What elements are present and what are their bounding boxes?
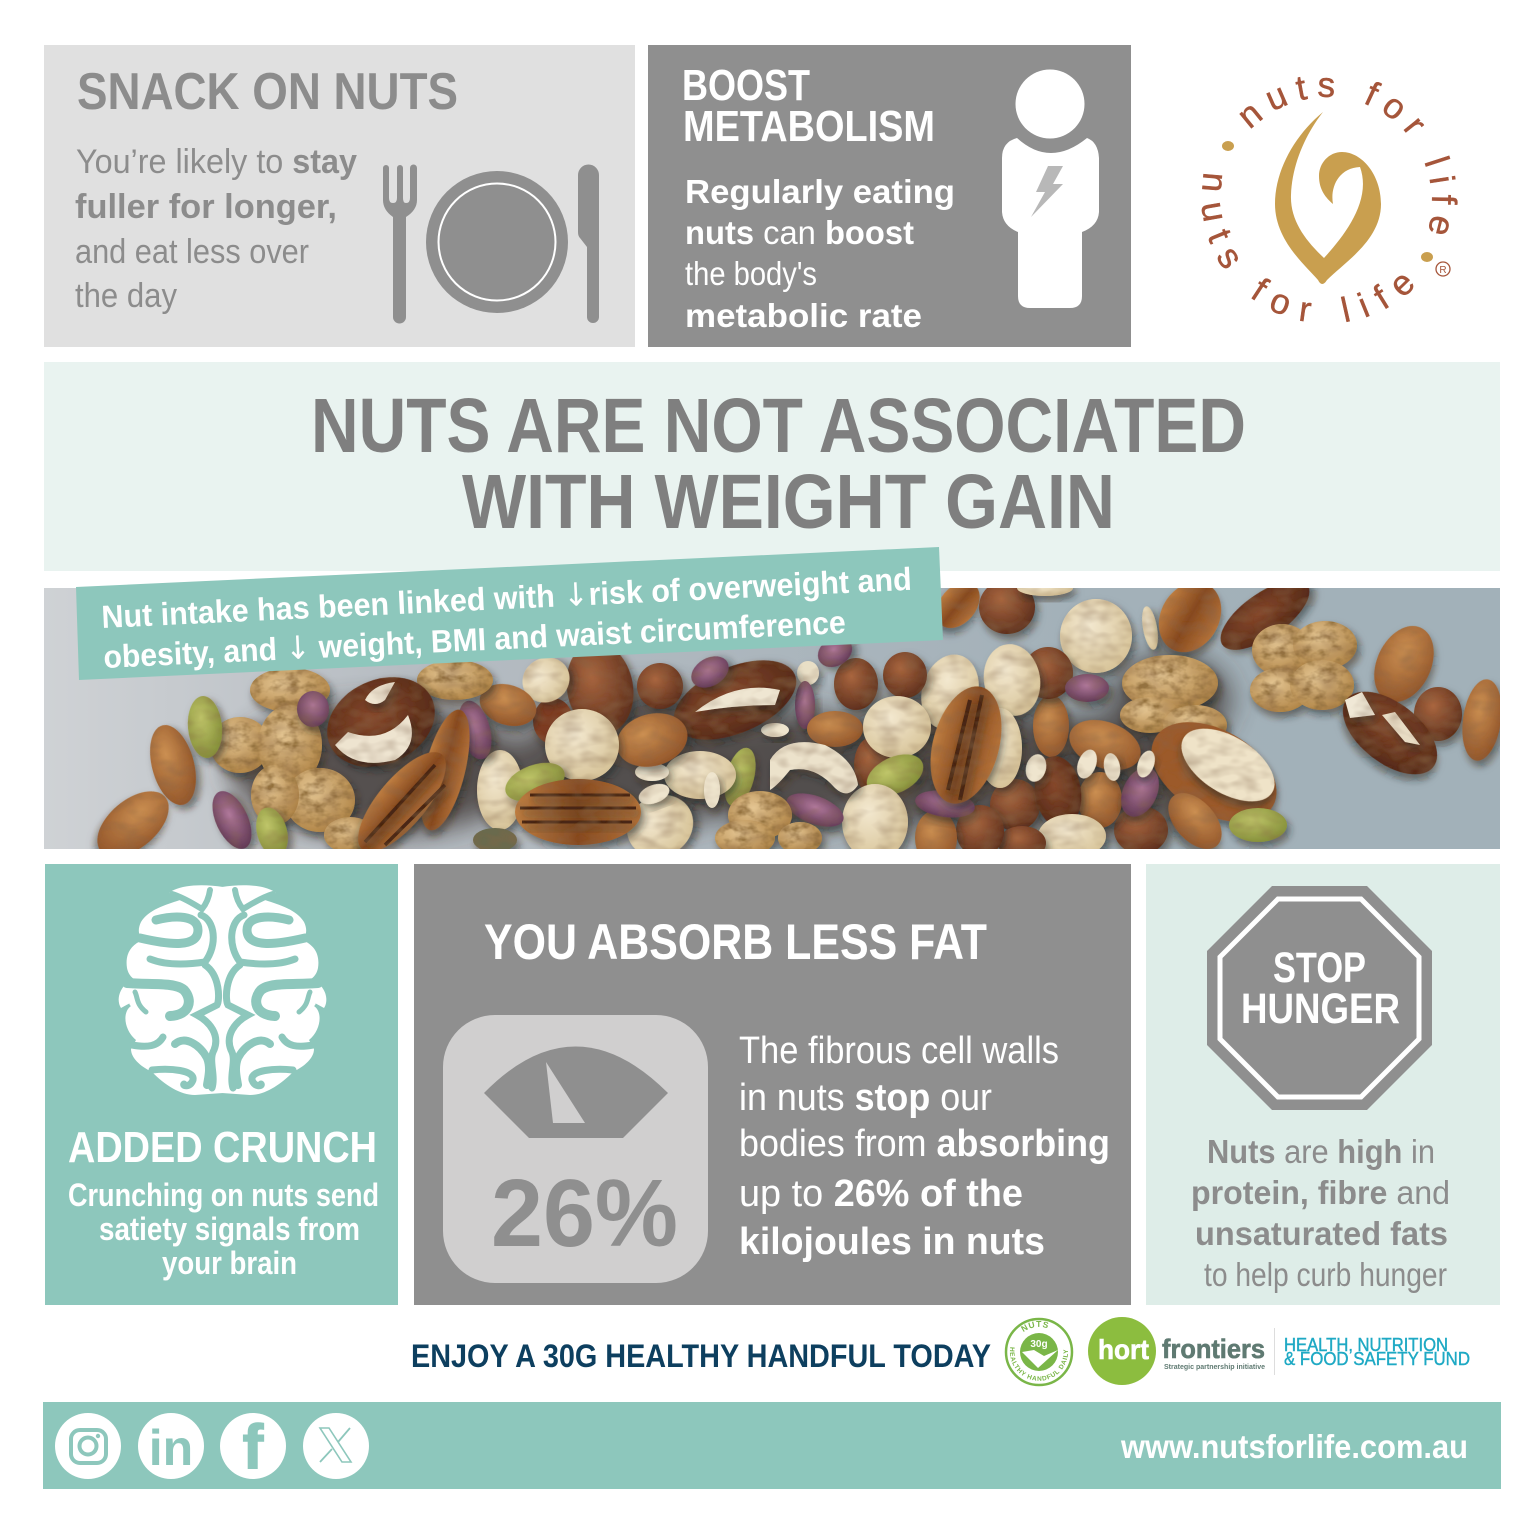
icon: person with lightning bolt (1002, 70, 1099, 308)
text block: hunger description: to help curb hunger (1204, 1256, 1447, 1293)
footer bar (43, 1402, 1501, 1489)
title: NUTS ARE NOT ASSOCIATED (311, 383, 1246, 469)
icon: stop sign: HUNGER (1241, 985, 1400, 1033)
logo: nuts for life: nuts for life (1239, 76, 1458, 234)
icon: fork, plate and knife (383, 164, 599, 324)
text block: metabolism description (685, 173, 955, 334)
title: WITH WEIGHT GAIN (462, 459, 1115, 545)
text block: hunger description: unsaturated fats (1195, 1215, 1448, 1252)
icon: 30g healthy handful badge: 30g (1030, 1339, 1048, 1350)
panel: boost metabolism (648, 45, 1131, 347)
logo: hort frontiers: Strategic partnership initiative (1164, 1364, 1265, 1371)
logo: health, nutrition and food safety fund: & FOOD SAFETY FUND (1284, 1349, 1470, 1369)
text block: metabolism description: the body's (685, 255, 817, 292)
logo: nuts for life: nuts for life (1202, 174, 1414, 322)
photo: mixed nuts (44, 588, 1500, 849)
text block: metabolism description: nuts can boost (685, 214, 914, 251)
icon: 30g healthy handful badge: NUTS (1020, 1321, 1048, 1332)
text block: absorption description: kilojoules in nuts (739, 1221, 1045, 1263)
logo: health, nutrition and food safety fund (1284, 1335, 1470, 1369)
icon: instagram (55, 1413, 121, 1479)
tagline: enjoy a 30g healthy handful: ENJOY A 30G HEALTHY HANDFUL TODAY (411, 1338, 991, 1374)
logo: nuts for life: R (1439, 265, 1447, 276)
heading: added crunch: ADDED CRUNCH (68, 1123, 377, 1172)
text block: absorption description: in nuts stop our (739, 1077, 992, 1119)
icon: brain (119, 885, 326, 1095)
text block: metabolism description: Regularly eating (685, 173, 955, 210)
title (311, 383, 1246, 545)
website url: www.nutsforlife.com.au (1120, 1428, 1468, 1465)
panel: stop hunger (1146, 864, 1500, 1305)
icon: 30g healthy handful badge: HEALTHY HANDFUL DAILY (1010, 1347, 1068, 1381)
heading: snack on nuts: SNACK ON NUTS (77, 63, 458, 121)
logo: hort frontiers (1088, 1317, 1275, 1385)
text block: absorption description: up to 26% of the (739, 1173, 1023, 1215)
callout: teal tape with nut intake statement: Nut intake has been linked with ↓risk of overweight and (101, 560, 912, 636)
text block: metabolism description: metabolic rate (685, 297, 922, 334)
icon: x (303, 1413, 369, 1479)
logo: hort frontiers: hort (1098, 1334, 1149, 1365)
logo: hort frontiers: frontiers (1162, 1334, 1265, 1364)
text block: snack description (75, 143, 357, 315)
text block: hunger description (1191, 1133, 1450, 1293)
text block: snack description: fuller for longer, (75, 188, 337, 226)
text block: crunch description: satiety signals from (99, 1211, 360, 1247)
text block: crunch description: your brain (162, 1245, 297, 1281)
text block: hunger description: protein, fibre and (1191, 1174, 1450, 1211)
icon: facebook (220, 1413, 286, 1482)
icon: weighing scale with 26 percent (443, 1015, 708, 1283)
text block: hunger description: Nuts are high in (1207, 1133, 1435, 1170)
text block: absorption description (739, 1030, 1110, 1263)
callout: teal tape with nut intake statement: obesity, and ↓ weight, BMI and waist circumference (103, 603, 847, 676)
panel: main headline banner (44, 362, 1500, 571)
icon: linkedin: in (149, 1420, 193, 1476)
icon: stop sign (1207, 886, 1432, 1110)
panel: added crunch (45, 864, 398, 1305)
icon: linkedin (138, 1413, 204, 1479)
logo: health, nutrition and food safety fund: HEALTH, NUTRITION (1284, 1335, 1448, 1355)
icon: weighing scale with 26 percent: 26% (491, 1160, 678, 1267)
text block: snack description: and eat less over (75, 233, 309, 271)
heading: boost metabolism: METABOLISM (683, 102, 935, 151)
text block: snack description: the day (75, 277, 177, 315)
icon: stop sign: STOP (1273, 944, 1366, 992)
heading: boost metabolism: BOOST (682, 61, 810, 110)
text block: crunch description: Crunching on nuts send (68, 1177, 379, 1213)
panel: snack on nuts (44, 45, 635, 347)
callout: teal tape with nut intake statement (76, 547, 943, 680)
icon: 30g healthy handful badge (1004, 1318, 1074, 1386)
text block: crunch description (68, 1177, 379, 1281)
heading: boost metabolism (682, 61, 935, 151)
panel: you absorb less fat (414, 864, 1131, 1305)
text block: snack description: You’re likely to stay (76, 143, 357, 181)
logo: nuts for life (1202, 76, 1458, 322)
text block: absorption description: The fibrous cell walls (739, 1030, 1059, 1072)
icon: facebook: f (243, 1413, 264, 1482)
text block: absorption description: bodies from absorbing (739, 1123, 1110, 1165)
heading: you absorb less fat: YOU ABSORB LESS FAT (484, 914, 987, 970)
